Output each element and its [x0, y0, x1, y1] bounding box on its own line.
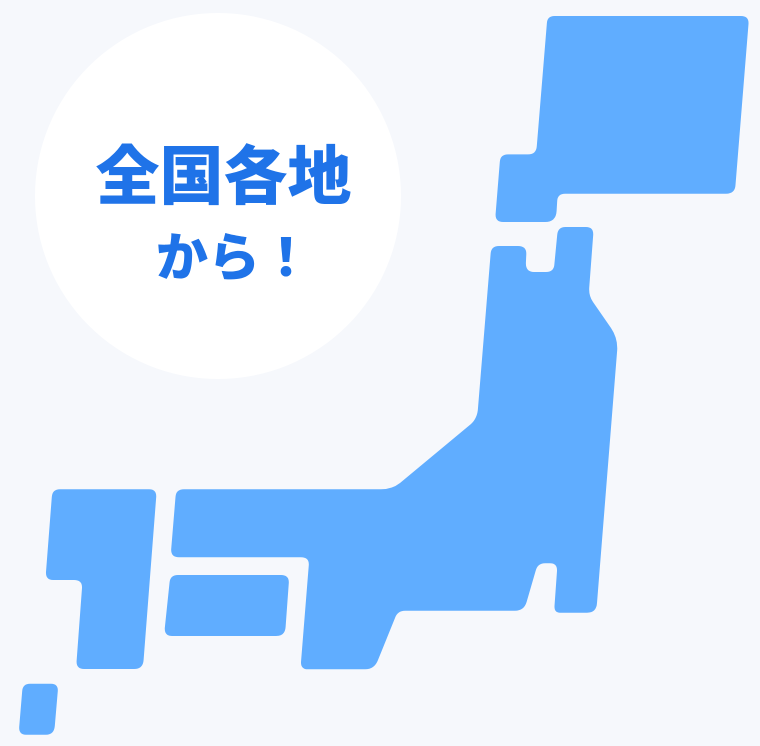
callout: nationwide circle: [35, 13, 401, 379]
heading: 全国各地: 全国各地: [96, 141, 352, 213]
subheading: から！: から！: [156, 230, 312, 288]
region: Honshu: [171, 227, 617, 669]
region: Kyushu: [46, 489, 156, 669]
region: Okinawa: [19, 684, 58, 735]
region: Shikoku: [165, 575, 289, 636]
region: Hokkaido: [496, 16, 749, 222]
